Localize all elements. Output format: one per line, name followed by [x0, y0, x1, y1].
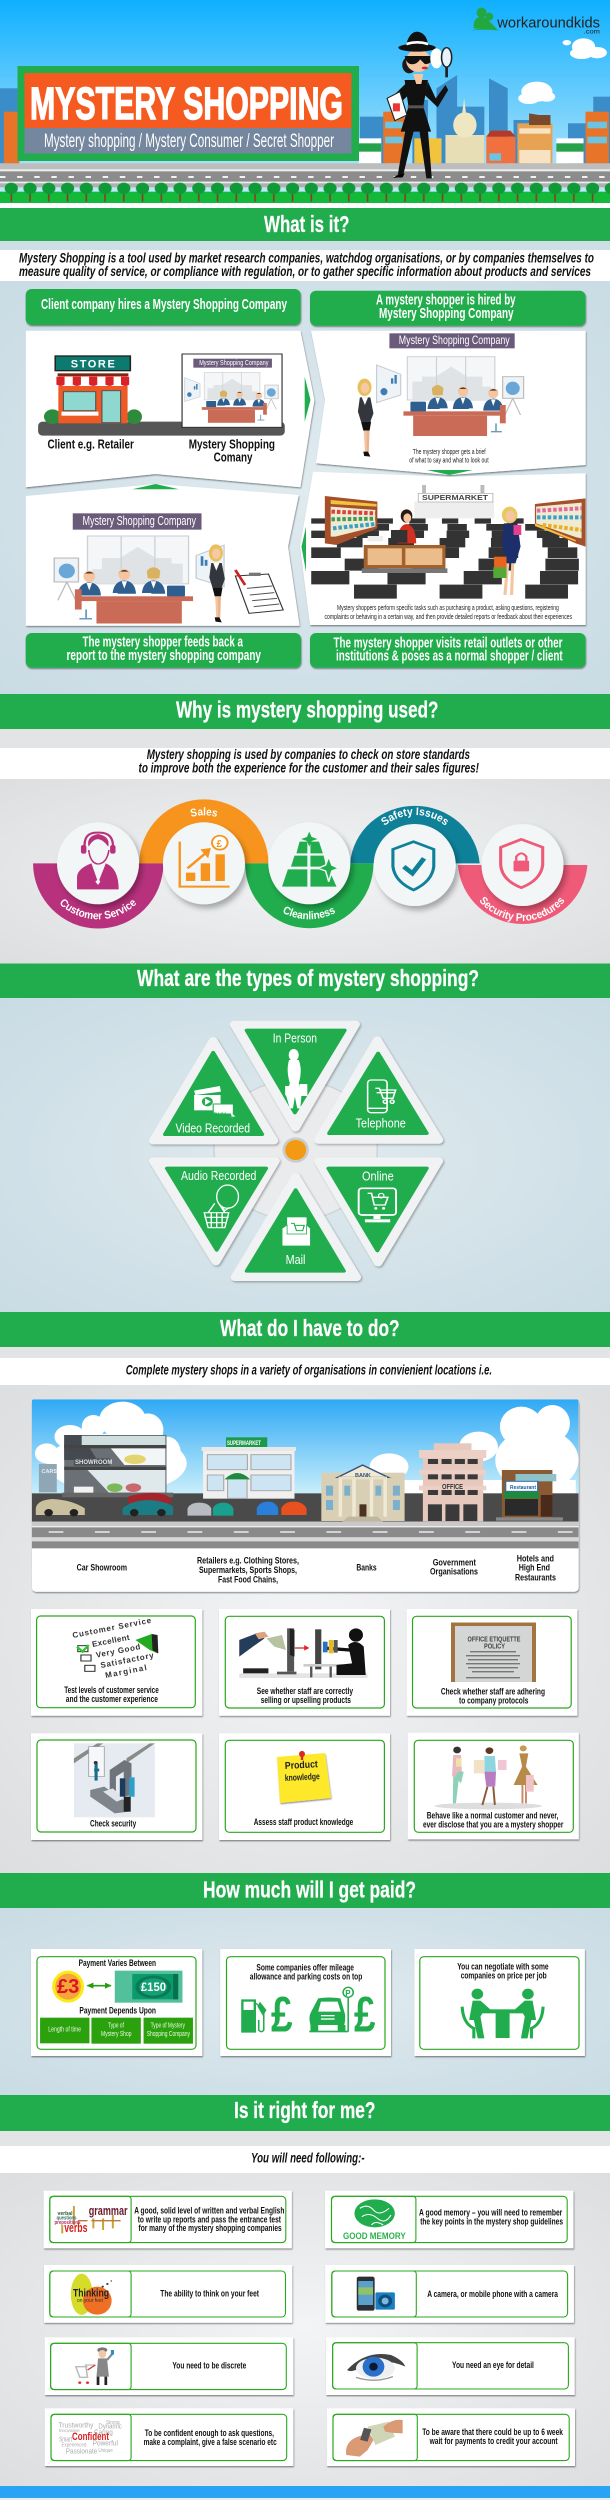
card: english: prepositions [54, 2220, 81, 2226]
card: english: questions [56, 2216, 77, 2222]
type labels [176, 1032, 406, 1267]
panel texts: STORE [71, 358, 115, 370]
card: payment range: Type of Mystery [151, 2021, 185, 2030]
panel texts: Mystery Shopping [189, 436, 275, 451]
card: thinking [44, 2265, 292, 2323]
panel: types of mystery shopping [0, 998, 610, 1312]
panel: pay [0, 1908, 610, 2095]
card: check security: Check security [90, 1819, 137, 1830]
wave labels [60, 807, 564, 922]
step 2 header [310, 291, 586, 326]
panel: what to do [0, 1385, 610, 1873]
card: payment range [31, 1949, 202, 2056]
road [0, 163, 610, 187]
hub disc [214, 1080, 377, 1220]
card: english [44, 2191, 292, 2248]
card: product knowledge: Assess staff product knowledge [254, 1817, 353, 1828]
supermarket [202, 1437, 296, 1499]
location labels: Fast Food Chains, [218, 1575, 278, 1586]
road under store [38, 422, 285, 436]
step 2 header: A mystery shopper is hired by [376, 292, 516, 309]
wave labels: Security Procedures [480, 896, 564, 922]
step 4 panel background [26, 484, 300, 626]
icon: safety shield [393, 842, 434, 890]
panel texts: SUPERMARKET [422, 495, 489, 502]
card: payment wait: wait for payments to credit your account [429, 2436, 558, 2447]
card: english: A good, solid level of written and verbal English [134, 2205, 285, 2216]
icon: audio basket [204, 1185, 238, 1228]
small signs [42, 1440, 536, 1491]
icon: mail [282, 1217, 310, 1246]
section heading: what do I do: What do I have to do? [220, 1315, 400, 1341]
card: thinking: on your feet [77, 2298, 104, 2304]
panel: process cycle [0, 281, 610, 694]
why intro text: to improve both the experience for the customer and their sales figures! [138, 761, 479, 776]
step 3 header [310, 633, 586, 668]
card: product knowledge [219, 1733, 390, 1840]
icon: online [359, 1188, 396, 1222]
arrows [132, 377, 473, 572]
panel: requirements [0, 2173, 610, 2486]
bottom-left meeting [54, 536, 224, 623]
card: customer service form: Satisfactory [100, 1651, 155, 1670]
card: confident: Innovative [59, 2428, 80, 2433]
step 2 header: Mystery Shopping Company [379, 305, 514, 322]
what to do intro [0, 1347, 610, 1385]
panel texts: Mystery Shopping Company [82, 514, 197, 528]
icon: sales chart [180, 836, 230, 887]
card: customer service form: Very Good [95, 1642, 141, 1660]
heading: What is it? [264, 211, 349, 237]
card: confident: Unique [98, 2448, 113, 2454]
card: confident: Caring [94, 2429, 113, 2436]
wave labels: £ [216, 839, 222, 850]
supermarket scene [311, 485, 585, 598]
card: company protocols: Check whether staff are adhering [441, 1686, 545, 1697]
card: discrete: You need to be discrete [172, 2361, 246, 2372]
panel texts [48, 333, 572, 621]
title text: MYSTERY SHOPPING [30, 78, 343, 129]
card: payment range: Type of [108, 2021, 125, 2030]
card: payment range: £150 [141, 1980, 166, 1994]
step 1 header [26, 289, 301, 325]
buildings [4, 98, 609, 163]
step 4 header [26, 633, 301, 668]
card: mileage: P [345, 1989, 351, 1998]
step 1 panel background [26, 331, 314, 487]
card: company protocols: OFFICE ETIQUETTE [468, 1634, 520, 1644]
card: customer service form: Test levels of customer service [64, 1685, 159, 1696]
card: eye: You need an eye for detail [452, 2360, 534, 2371]
card: payment range: Payment Depends Upon [79, 2005, 156, 2016]
location labels: Restaurants [515, 1572, 556, 1583]
needs intro: You will need following:- [251, 2151, 365, 2166]
card: english: to write up reports and pass the entrance test [138, 2214, 282, 2225]
city skyline [0, 75, 610, 163]
office [419, 1443, 486, 1521]
icon: security shield [501, 839, 543, 888]
illustrations [38, 333, 585, 623]
right panel meeting [377, 357, 524, 436]
card: memory: GOOD MEMORY [343, 2231, 406, 2242]
panel texts: Comany [214, 450, 253, 465]
card: mileage: Some companies offer mileage [256, 1963, 354, 1974]
card: mileage: £ [271, 1986, 293, 2042]
definition text [0, 241, 610, 281]
chart: wave of reasons [0, 779, 610, 964]
card: selling: See whether staff are correctly [257, 1686, 353, 1697]
subtitle: Mystery shopping / Mystery Consumer / Secret Shopper [44, 131, 334, 152]
clouds [518, 38, 607, 104]
card: payment range: Mystery Shop [101, 2029, 132, 2038]
panel texts: Mystery Shopping Company [199, 358, 269, 367]
card: camera [325, 2265, 574, 2323]
section heading: paid: How much will I get paid? [203, 1877, 416, 1903]
logo text: workaroundkids [496, 14, 600, 31]
icon: in person [285, 1049, 307, 1108]
type labels: Audio Recorded [181, 1169, 256, 1183]
card: thinking: The ability to think on your feet [160, 2288, 260, 2299]
section heading: is it right: Is it right for me? [234, 2097, 376, 2123]
footer bar [0, 2486, 610, 2500]
card: camera: A camera, or mobile phone with a camera [427, 2289, 558, 2300]
small signs: SUPERMARKET [227, 1440, 261, 1447]
panel texts: Client e.g. Retailer [48, 436, 134, 451]
card: english: grammar [89, 2203, 128, 2218]
card: mileage: allowance and parking costs on top [250, 1971, 362, 1982]
location labels: Retailers e.g. Clothing Stores, [197, 1556, 299, 1567]
grass and trees [0, 182, 610, 203]
card: confident: To be confident enough to ask questions, [145, 2428, 274, 2439]
locations street scene [32, 1399, 579, 1592]
icon: telephone [368, 1080, 396, 1113]
icon: clean floor [282, 832, 338, 887]
section heading: why: Why is mystery shopping used? [176, 696, 438, 722]
small signs: SHOWROOM [75, 1460, 112, 1466]
card: confident: Confident [72, 2431, 109, 2443]
icon: fuel pump [241, 1999, 266, 2033]
card: confident: Dynamic [98, 2424, 122, 2431]
card: eye [326, 2337, 575, 2395]
small signs: BANK [355, 1473, 371, 1479]
location labels: High End [519, 1563, 550, 1574]
section heading: what do I do [0, 1312, 610, 1347]
location labels: Car Showroom [77, 1563, 127, 1574]
card: negotiate [414, 1949, 585, 2056]
card: discrete [45, 2337, 293, 2395]
showroom [39, 1435, 173, 1497]
section band: What is it [0, 203, 610, 241]
wave labels: Cleanliness [284, 906, 335, 920]
card: product knowledge: Product [285, 1759, 319, 1772]
why intro text: Mystery shopping is used by companies to check on store standards [147, 747, 470, 762]
card: selling [219, 1609, 390, 1716]
step 3 panel background [311, 331, 586, 475]
panel texts: The mystery shopper gets a brief [413, 447, 486, 456]
panel texts: of what to say and what to look out [409, 456, 489, 465]
card: mileage: £ [354, 1986, 376, 2042]
section heading: paid [0, 1873, 610, 1908]
section heading: types [0, 964, 610, 998]
clipboard [235, 570, 283, 613]
section heading: is it right [0, 2095, 610, 2131]
type labels: Mail [286, 1253, 305, 1267]
card: payment wait [327, 2408, 575, 2466]
location labels: Government [433, 1557, 477, 1568]
card: payment range: Length of time [48, 2025, 81, 2034]
card: selling: selling or upselling products [261, 1695, 351, 1706]
location labels [77, 1553, 556, 1586]
restaurant [496, 1470, 563, 1521]
card: confident: Passionate [66, 2448, 97, 2455]
small signs: Restaurant [510, 1485, 536, 1491]
section heading: why [0, 694, 610, 729]
card: memory [325, 2191, 574, 2248]
small signs: CARS [42, 1469, 57, 1475]
hub [282, 1137, 309, 1163]
step 5 panel background [300, 472, 586, 625]
cars [36, 1493, 307, 1516]
store [44, 356, 142, 424]
card: company protocols: to company protocols [459, 1695, 528, 1706]
triangle frames [153, 1024, 439, 1277]
type labels: BUY [213, 1112, 227, 1119]
location labels: Supermarkets, Sports Shops, [199, 1565, 297, 1576]
step 4 header: report to the mystery shopping company [66, 647, 261, 664]
card: behave normally [408, 1733, 579, 1839]
wave labels: Safety Issues [381, 808, 448, 825]
card: mileage [220, 1949, 391, 2056]
card: company protocols [407, 1609, 577, 1716]
header banner scene [0, 0, 610, 208]
icon: video [194, 1086, 235, 1119]
icon: customer service [77, 833, 119, 889]
card: check security [31, 1733, 202, 1840]
card: english: verbal [58, 2211, 73, 2217]
card: confident: make a complaint, give a false scenario etc [144, 2437, 277, 2448]
card: english: for many of the mystery shopping companies [138, 2223, 282, 2234]
section heading: types: What are the types of mystery shopping? [137, 965, 479, 991]
card: confident: Smart [59, 2437, 72, 2444]
spy character [387, 32, 452, 178]
bank [321, 1465, 405, 1522]
logo icon [471, 8, 500, 31]
card: customer service form: Customer Service [72, 1616, 152, 1640]
card: english: verbs [64, 2220, 88, 2235]
small signs: OFFICE [442, 1482, 463, 1491]
card: payment range: Payment Varies Between [79, 1958, 156, 1969]
location labels: Organisations [430, 1567, 478, 1578]
needs intro [0, 2131, 610, 2173]
type labels: In Person [273, 1032, 317, 1046]
location labels: Banks [356, 1563, 377, 1574]
type labels: Online [362, 1170, 394, 1184]
card: confident: Strong [106, 2420, 120, 2426]
card: confident: Trustworthy [58, 2423, 94, 2430]
card: company protocols: POLICY [484, 1642, 505, 1650]
card: customer service form: Marginal [104, 1663, 147, 1680]
header banner scene: .com [584, 30, 600, 36]
card: payment range: £3 [57, 1976, 79, 1998]
type labels: Video Recorded [176, 1122, 250, 1136]
card: confident: Experienced [62, 2443, 87, 2449]
clouds [35, 1402, 578, 1493]
card: customer service form: and the customer experience [66, 1694, 158, 1705]
card: negotiate: You can negotiate with some [457, 1961, 549, 1972]
arcs [33, 799, 587, 929]
road [32, 1522, 578, 1548]
card: thinking: Thinking [73, 2288, 109, 2300]
card: payment range: Shopping Company [147, 2029, 190, 2038]
step 4 header: The mystery shopper feeds back a [82, 634, 243, 651]
card: customer service form [31, 1609, 202, 1716]
title banner [18, 66, 359, 161]
step 1 header: Client company hires a Mystery Shopping Company [41, 296, 287, 313]
location labels: Hotels and [517, 1553, 554, 1564]
type labels: Telephone [356, 1117, 406, 1131]
card: product knowledge: knowledge [285, 1771, 320, 1783]
card: confident: Powerful [93, 2441, 118, 2448]
card: customer service form: Excellent [91, 1633, 131, 1649]
why intro text [0, 729, 610, 779]
card: confident [45, 2408, 293, 2466]
wave labels: Customer Service [60, 899, 136, 920]
wave labels: Sales [190, 807, 218, 816]
company box [182, 354, 282, 427]
card: negotiate: companies on price per job [461, 1970, 547, 1981]
panel texts: Mystery Shopping Company [399, 333, 510, 347]
triangle green faces [165, 1030, 427, 1271]
icon: car and parking [309, 1987, 353, 2032]
circles [57, 822, 564, 906]
